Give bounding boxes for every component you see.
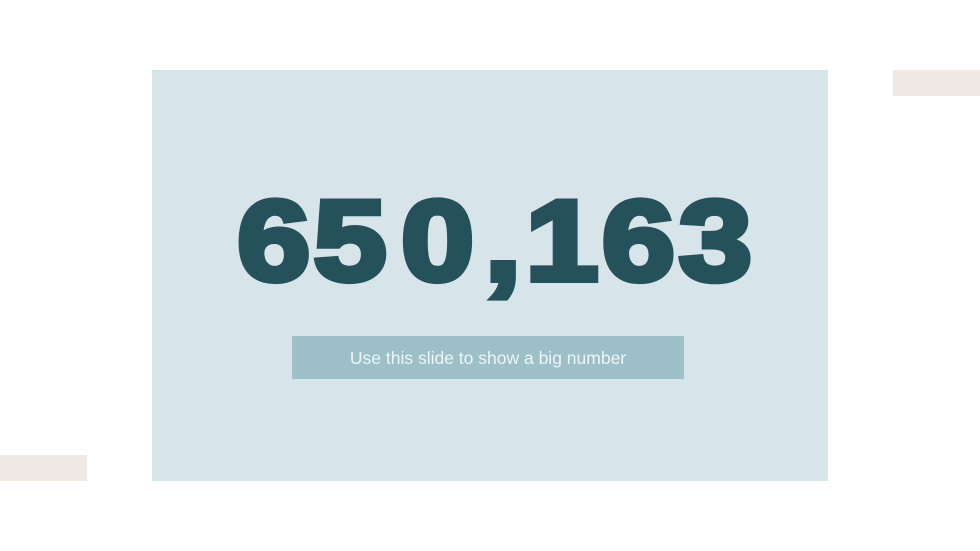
caption box: Use this slide to show a big number (350, 348, 626, 368)
big number: 650,163 (237, 178, 752, 305)
caption box (292, 336, 684, 379)
decorative bar: bottom left (0, 455, 87, 481)
decorative bar: top right (893, 70, 980, 96)
panel: main (152, 70, 828, 481)
